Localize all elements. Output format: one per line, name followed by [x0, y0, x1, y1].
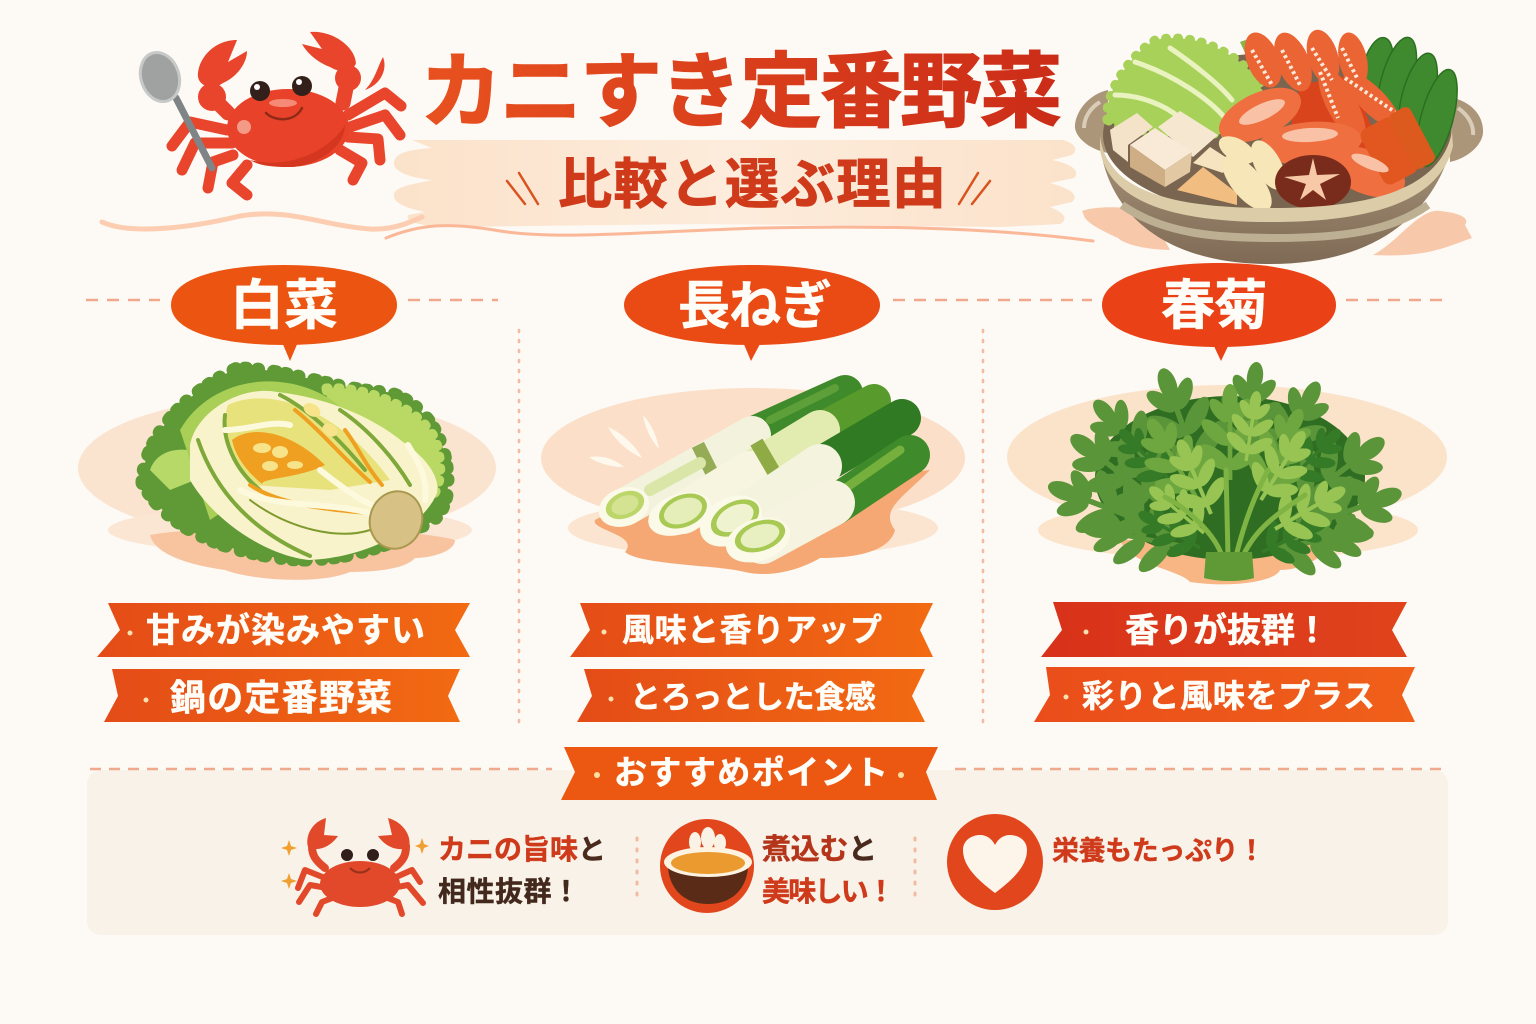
orange upper veins: [250, 410, 382, 513]
bright fronds: [1133, 387, 1360, 555]
text: カニの旨味と 相性抜群: カニの旨味と: [438, 834, 606, 865]
deep fronds: [1102, 412, 1358, 576]
ribbon: おすすめポイント: [561, 747, 938, 800]
tofu cubes: [1110, 111, 1237, 205]
heading pill: 長ねぎ: 長ねぎ: [678, 278, 832, 336]
mushroom slices: [1214, 130, 1292, 219]
crab body highlights: [237, 99, 345, 167]
text: 煮込むと 美味しい: 煮込むと: [762, 833, 877, 866]
ribbon: 彩りと風味をプラス: [1034, 667, 1415, 722]
text: カニの旨味と 相性抜群: 相性抜群！: [438, 876, 580, 907]
outer fronds: [1034, 355, 1415, 585]
dashed top lines: [90, 768, 1446, 770]
text: 煮込むと 美味しい: 美味しい！: [762, 876, 895, 907]
green inner veins: [198, 395, 410, 556]
leek 3: [737, 418, 902, 522]
light green frilly leaves: [326, 388, 441, 500]
title: カニすき定番野菜: [420, 47, 1062, 138]
ribbon: とろっとした食感: とろっとした食感: [630, 680, 876, 715]
pot bowl: [1100, 140, 1453, 264]
white ribs: [225, 424, 426, 516]
clay pot hot pot illustration: [1075, 26, 1483, 264]
heart cells: [253, 400, 340, 471]
text: カニの旨味と 相性抜群: [438, 834, 606, 907]
wavy decorative strokes: [102, 214, 1093, 241]
icon: soup bowl: [660, 819, 754, 913]
icon: green onions: [593, 388, 910, 570]
item: simmered: [660, 819, 895, 913]
crab body: [227, 89, 349, 167]
stem band: [1204, 552, 1254, 581]
heading pill: 長ねぎ: [624, 265, 880, 361]
hakusai watercolor background: [78, 396, 496, 580]
ribbon: おすすめポイント: おすすめポイント: [614, 754, 888, 791]
text: 煮込むと 美味しい: [762, 833, 895, 907]
panel: recommended points: [87, 747, 1448, 935]
yellow inner leaves: [225, 398, 390, 490]
heading pill: 白菜: [171, 265, 397, 361]
heading pill: 春菊: 春菊: [1161, 276, 1268, 336]
crab claws: [198, 32, 384, 111]
subtitle: 比較と選ぶ理由: [558, 155, 946, 215]
ribbon: 鍋の定番野菜: 鍋の定番野菜: [170, 677, 392, 718]
naganegi watercolor background: [541, 388, 965, 574]
pot shadow wash: [1082, 207, 1472, 255]
ribbon: 香りが抜群: [1041, 602, 1407, 657]
ribbon: 風味と香りアップ: [570, 603, 933, 657]
crab leg white edges: [1252, 48, 1395, 118]
column dotted dividers: [519, 330, 983, 722]
ribbon: 甘みが染みやすい: 甘みが染みやすい: [146, 611, 425, 650]
heading pill: 白菜: 白菜: [230, 276, 338, 336]
column: hakusai: [78, 265, 496, 722]
ribbon: 甘みが染みやすい: [97, 603, 470, 657]
section dashed dividers: [86, 299, 1446, 301]
pot handles: [1075, 90, 1483, 162]
ribbon: とろっとした食感: [577, 669, 925, 722]
column: shungiku: [1007, 263, 1447, 722]
leek 1: [625, 388, 845, 507]
leek 4: [762, 450, 910, 541]
ribbon: 鍋の定番野菜: [104, 669, 460, 722]
icon: sparkle marks: [589, 415, 659, 467]
cabbage stem: [362, 484, 430, 556]
cream leaf body: [190, 391, 438, 560]
item: nutrition: [947, 814, 1265, 910]
leek 2: [683, 401, 874, 513]
icon: shungiku leaves: [1034, 355, 1415, 585]
pot rim: [1100, 132, 1453, 222]
crab legs in pot: [1211, 26, 1437, 207]
subtitle sparks: [507, 173, 990, 204]
dark leaf mass: [1095, 396, 1365, 560]
icon: small crab: [281, 818, 429, 914]
dotted separator: [914, 838, 916, 900]
green vegetables: [1355, 33, 1465, 170]
text: 栄養もたっぷり: 栄養もたっぷり！: [1052, 836, 1265, 866]
ribbon: 風味と香りアップ: 風味と香りアップ: [622, 612, 882, 648]
panel background: [87, 770, 1448, 935]
lettuce: [1107, 38, 1275, 135]
pot bands: [1122, 205, 1428, 238]
ribbon: 彩りと風味をプラス: 彩りと風味をプラス: [1082, 678, 1375, 714]
heading pill: 春菊: [1102, 263, 1336, 361]
dotted separator: [636, 838, 638, 900]
crab legs: [172, 78, 401, 195]
spoon: [134, 47, 212, 168]
icon: napa cabbage: [142, 368, 448, 560]
lower cream shade: [250, 500, 370, 534]
cut ends: [593, 480, 796, 570]
crab eyes: [250, 76, 312, 101]
ribbon: 香りが抜群: 香りが抜群！: [1125, 611, 1329, 650]
crab smile: [266, 108, 302, 119]
shiitake: [1275, 155, 1351, 209]
pot interior: [1103, 53, 1451, 217]
item: crab umami: [281, 818, 606, 914]
crab mascot with spoon: [134, 32, 401, 195]
orange heart: [232, 432, 325, 484]
middle fronds: [1121, 384, 1331, 514]
icon: heart: [947, 814, 1043, 910]
outer leaves: [142, 368, 448, 560]
shungiku watercolor background: [1007, 385, 1447, 584]
stems: [1165, 470, 1305, 556]
column: naganegi: [541, 265, 965, 722]
header banner brush: [394, 140, 1076, 227]
